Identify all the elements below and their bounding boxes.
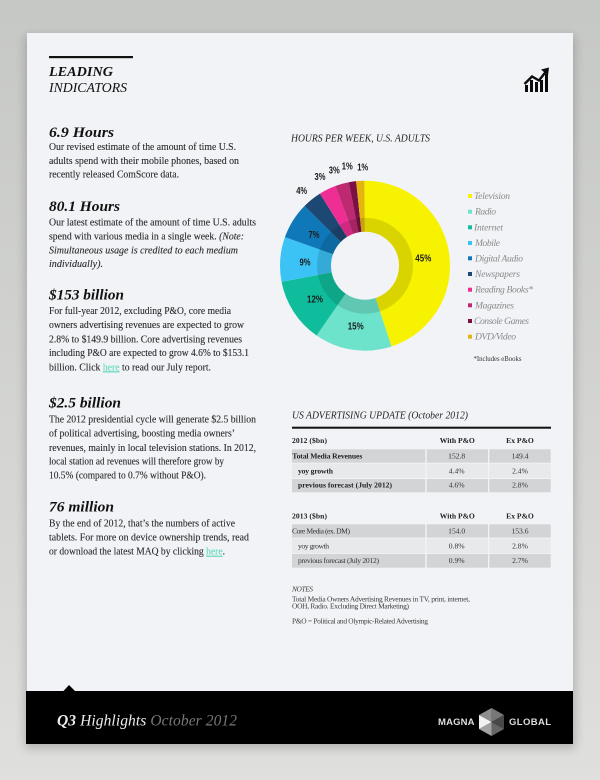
text block: 80.1 Hours: 80.1 Hours (49, 199, 121, 215)
donut chart: hours per week: 15% (348, 320, 364, 332)
text block: 80.1 Hours: spend with various media in a single week. (Note: (49, 230, 244, 242)
text block: $2.5 billion (48, 395, 256, 481)
notes: P&O = Political and Olympic-Related Advertising (292, 617, 428, 626)
legend (468, 191, 533, 343)
heading: leading indicators (48, 56, 133, 96)
text block: $153 billion: For full-year 2012, excluding P&O, core media (49, 305, 231, 317)
table: 2012: 4.4% (449, 466, 465, 475)
text block: $153 billion: 2.8% to $149.9 billion. Core advertising revenues (49, 333, 242, 345)
text block: 76 million: 76 million (49, 500, 114, 516)
footer title: Q3 Highlights October 2012 (57, 713, 237, 730)
panel: page sheet (27, 33, 573, 693)
text block: $2.5 billion: of political advertising, boosting media owners’ (49, 428, 235, 440)
table: 2012: previous forecast (July 2012) (298, 481, 392, 490)
notes: Total Media Owners Advertising Revenues in TV, print, internet, (292, 594, 470, 603)
table heading: US ADVERTISING UPDATE (October 2012) (292, 411, 468, 422)
table: 2012: Total Media Revenues (292, 451, 362, 460)
heading: leading indicators: LEADING (48, 65, 113, 80)
notes: NOTES (291, 584, 313, 593)
text block: $2.5 billion: The 2012 presidential cycle will generate $2.5 billion (49, 414, 256, 426)
legend: Magazines (474, 300, 514, 311)
logo: Magna Global (438, 708, 551, 736)
table: 2013: 0.9% (449, 556, 465, 565)
heading: leading indicators: INDICATORS (48, 81, 127, 96)
text block: $153 billion: owners advertising revenues are expected to grow (49, 319, 244, 331)
donut chart: hours per week: 3% (314, 171, 326, 183)
table: 2013: yoy growth (298, 541, 329, 550)
table: 2012: 2012 ($bn) (292, 436, 327, 445)
table: 2013: Core Media (ex. DM) (292, 526, 350, 535)
legend: Reading Books* (474, 285, 533, 296)
table: 2012: Ex P&O (506, 436, 534, 445)
donut chart: hours per week: 1% (357, 162, 369, 174)
donut chart: hours per week: 7% (308, 229, 320, 241)
text block: 6.9 Hours: recently released ComScore data. (49, 169, 179, 181)
legend: Mobile (474, 238, 501, 249)
chart title: HOURS PER WEEK, U.S. ADULTS (290, 133, 430, 144)
text block: $2.5 billion: $2.5 billion (48, 395, 121, 411)
logo: Magna Global: MAGNA (438, 717, 475, 728)
table: 2013: 2.7% (512, 556, 529, 565)
legend: Internet (473, 222, 503, 233)
table: 2013: 0.8% (449, 541, 465, 550)
table: 2012: 2.8% (512, 481, 529, 490)
footer bar (26, 685, 573, 744)
text block: 80.1 Hours: Our latest estimate of the amount of time U.S. adults (49, 217, 256, 229)
table: 2012: With P&O (440, 436, 475, 445)
text block: 80.1 Hours (49, 199, 256, 270)
table: 2013 (292, 511, 551, 568)
donut chart: hours per week: 4% (296, 185, 308, 197)
table: 2012 (292, 436, 551, 492)
legend: DVD/Video (474, 332, 516, 343)
text block: 80.1 Hours: Simultaneous usage is credited to each medium (49, 244, 238, 256)
table: 2013: previous forecast (July 2012) (298, 556, 379, 565)
text block: $153 billion (48, 287, 249, 373)
table: 2012: yoy growth (298, 466, 334, 475)
text block: $2.5 billion: revenues, mainly in local television stations. In 2012, (49, 442, 256, 454)
legend: Newspapers (474, 269, 520, 280)
text block: 6.9 Hours: adults spend with their mobile phones, based on (49, 155, 240, 167)
text block: 76 million: or download the latest MAQ by clicking here. (49, 546, 225, 558)
table: 2012: 2.4% (512, 466, 529, 475)
donut chart: hours per week: 3% (329, 165, 340, 177)
text block: 76 million: By the end of 2012, that’s the numbers of active (49, 518, 235, 530)
text block: $153 billion: $153 billion (48, 287, 124, 303)
text block: $2.5 billion: local station ad revenues will therefore grow by (49, 456, 224, 468)
donut chart: hours per week (296, 161, 432, 332)
table: 2013: With P&O (440, 511, 475, 520)
text block: 6.9 Hours (49, 125, 240, 181)
table: 2013: Ex P&O (506, 511, 534, 520)
text block: 76 million (49, 500, 249, 558)
table: 2013: 2013 ($bn) (292, 511, 327, 520)
icon: rising chart (524, 68, 549, 92)
legend: Television (474, 191, 510, 202)
table: 2012: 149.4 (511, 451, 529, 460)
donut chart: hours per week: 45% (415, 252, 432, 264)
logo: Magna Global: GLOBAL (509, 717, 551, 728)
notes (291, 584, 470, 626)
text block: 6.9 Hours: Our revised estimate of the amount of time U.S. (49, 141, 236, 153)
text block: 6.9 Hours: 6.9 Hours (49, 125, 115, 141)
table: 2012: 152.8 (448, 451, 465, 460)
table: 2013: 154.0 (448, 526, 465, 535)
text block: $153 billion: including P&O are expected to grow 4.6% to $153.1 (49, 347, 249, 359)
text block: 80.1 Hours: individually). (49, 258, 103, 270)
table: 2012: 4.6% (449, 481, 465, 490)
text block: $153 billion: billion. Click here to read our July report. (49, 361, 211, 373)
donut chart: hours per week: 9% (300, 256, 311, 268)
legend: Digital Audio (474, 253, 523, 264)
donut chart: hours per week: 12% (307, 294, 324, 306)
footnote: includes eBooks: *Includes eBooks (474, 356, 522, 363)
donut chart: hours per week: 1% (342, 161, 353, 173)
notes: OOH, Radio. Excluding Direct Marketing) (292, 602, 410, 611)
legend: Console Games (474, 316, 529, 327)
table: 2013: 153.6 (511, 526, 529, 535)
text block: 76 million: tablets. For more on device ownership trends, read (49, 532, 249, 544)
text block: $2.5 billion: 10.5% (compared to 0.7% without P&O). (49, 469, 206, 481)
table: 2013: 2.8% (512, 541, 529, 550)
legend: Radio (474, 207, 496, 218)
